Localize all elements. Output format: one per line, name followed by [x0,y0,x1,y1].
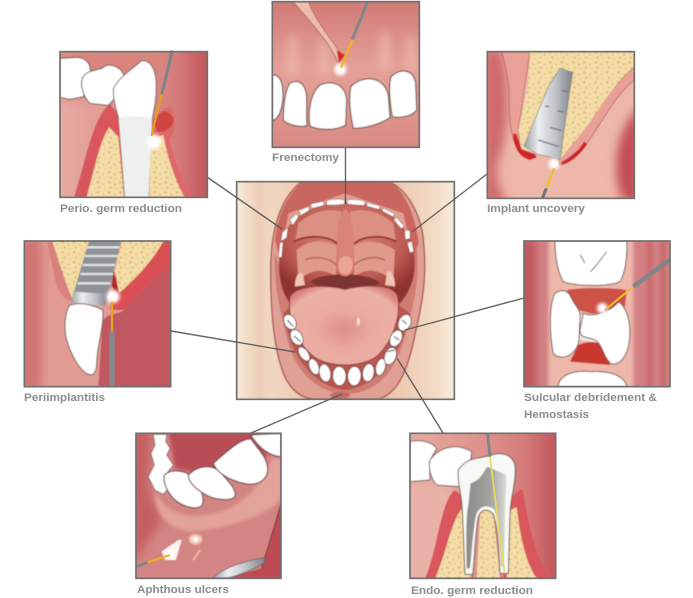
bone [47,242,72,301]
laser instrument [341,2,368,68]
label: aphthous ulcers: Aphthous ulcers [137,584,229,596]
panel: implant uncovery [483,48,640,203]
main tooth [458,454,515,574]
uvula [337,208,354,276]
panel: perio germ reduction [57,48,207,197]
red papillae [567,288,627,316]
laser instrument [152,52,172,135]
label: periimplantitis: Periimplantitis [24,392,105,404]
panel: central open mouth [237,182,454,399]
mouth interior [279,202,415,303]
main tooth [113,61,156,197]
frame [60,52,207,197]
panel: periimplantitis [20,238,171,392]
back teeth [410,441,437,482]
label: hemostasis: Hemostasis [524,409,589,421]
laser instrument [488,433,504,572]
bone [518,52,634,159]
back teeth [60,57,90,99]
tongue [289,286,399,365]
laser instrument [605,259,670,310]
panel: sulcular debridement and hemostasis [520,238,670,392]
frame [136,433,281,578]
crown [65,304,103,375]
laser instrument [543,168,554,198]
panel: frenectomy [272,2,419,147]
frenum [293,2,343,62]
red margins [513,133,537,160]
implant threads [71,241,121,305]
label: sulcular debridement and hemostasis: Sulcular debridement & [524,392,657,404]
center white area [579,312,598,343]
frame [272,2,419,147]
frame [487,52,634,198]
glow [147,134,161,149]
palate folds and throat [295,210,342,242]
teeth [550,241,630,387]
mirror tool [212,558,265,578]
upper teeth [278,199,414,257]
gum and bone [74,104,125,197]
implant [524,68,573,159]
lower teeth [281,312,414,386]
label: implant uncovery: Implant uncovery [487,203,586,215]
panel: endo germ reduction [407,433,556,583]
panel: aphthous ulcers [132,430,282,578]
label: frenectomy: Frenectomy [272,152,340,164]
frame [24,241,171,387]
ulcers [189,534,202,545]
laser instrument [136,555,170,567]
frame [410,433,556,578]
frame [237,182,454,399]
front teeth [164,433,281,508]
label: perio germ reduction: Perio. germ reduction [60,203,182,215]
lower gum [283,303,410,390]
pulp chamber [466,467,507,568]
molars [148,434,173,494]
laser instrument [108,302,115,387]
teeth [272,71,417,129]
label: endo germ reduction: Endo. germ reduction [411,585,533,597]
frame [524,241,670,387]
connector lines [171,147,524,433]
gum and bone [425,490,473,578]
lips [271,183,425,399]
